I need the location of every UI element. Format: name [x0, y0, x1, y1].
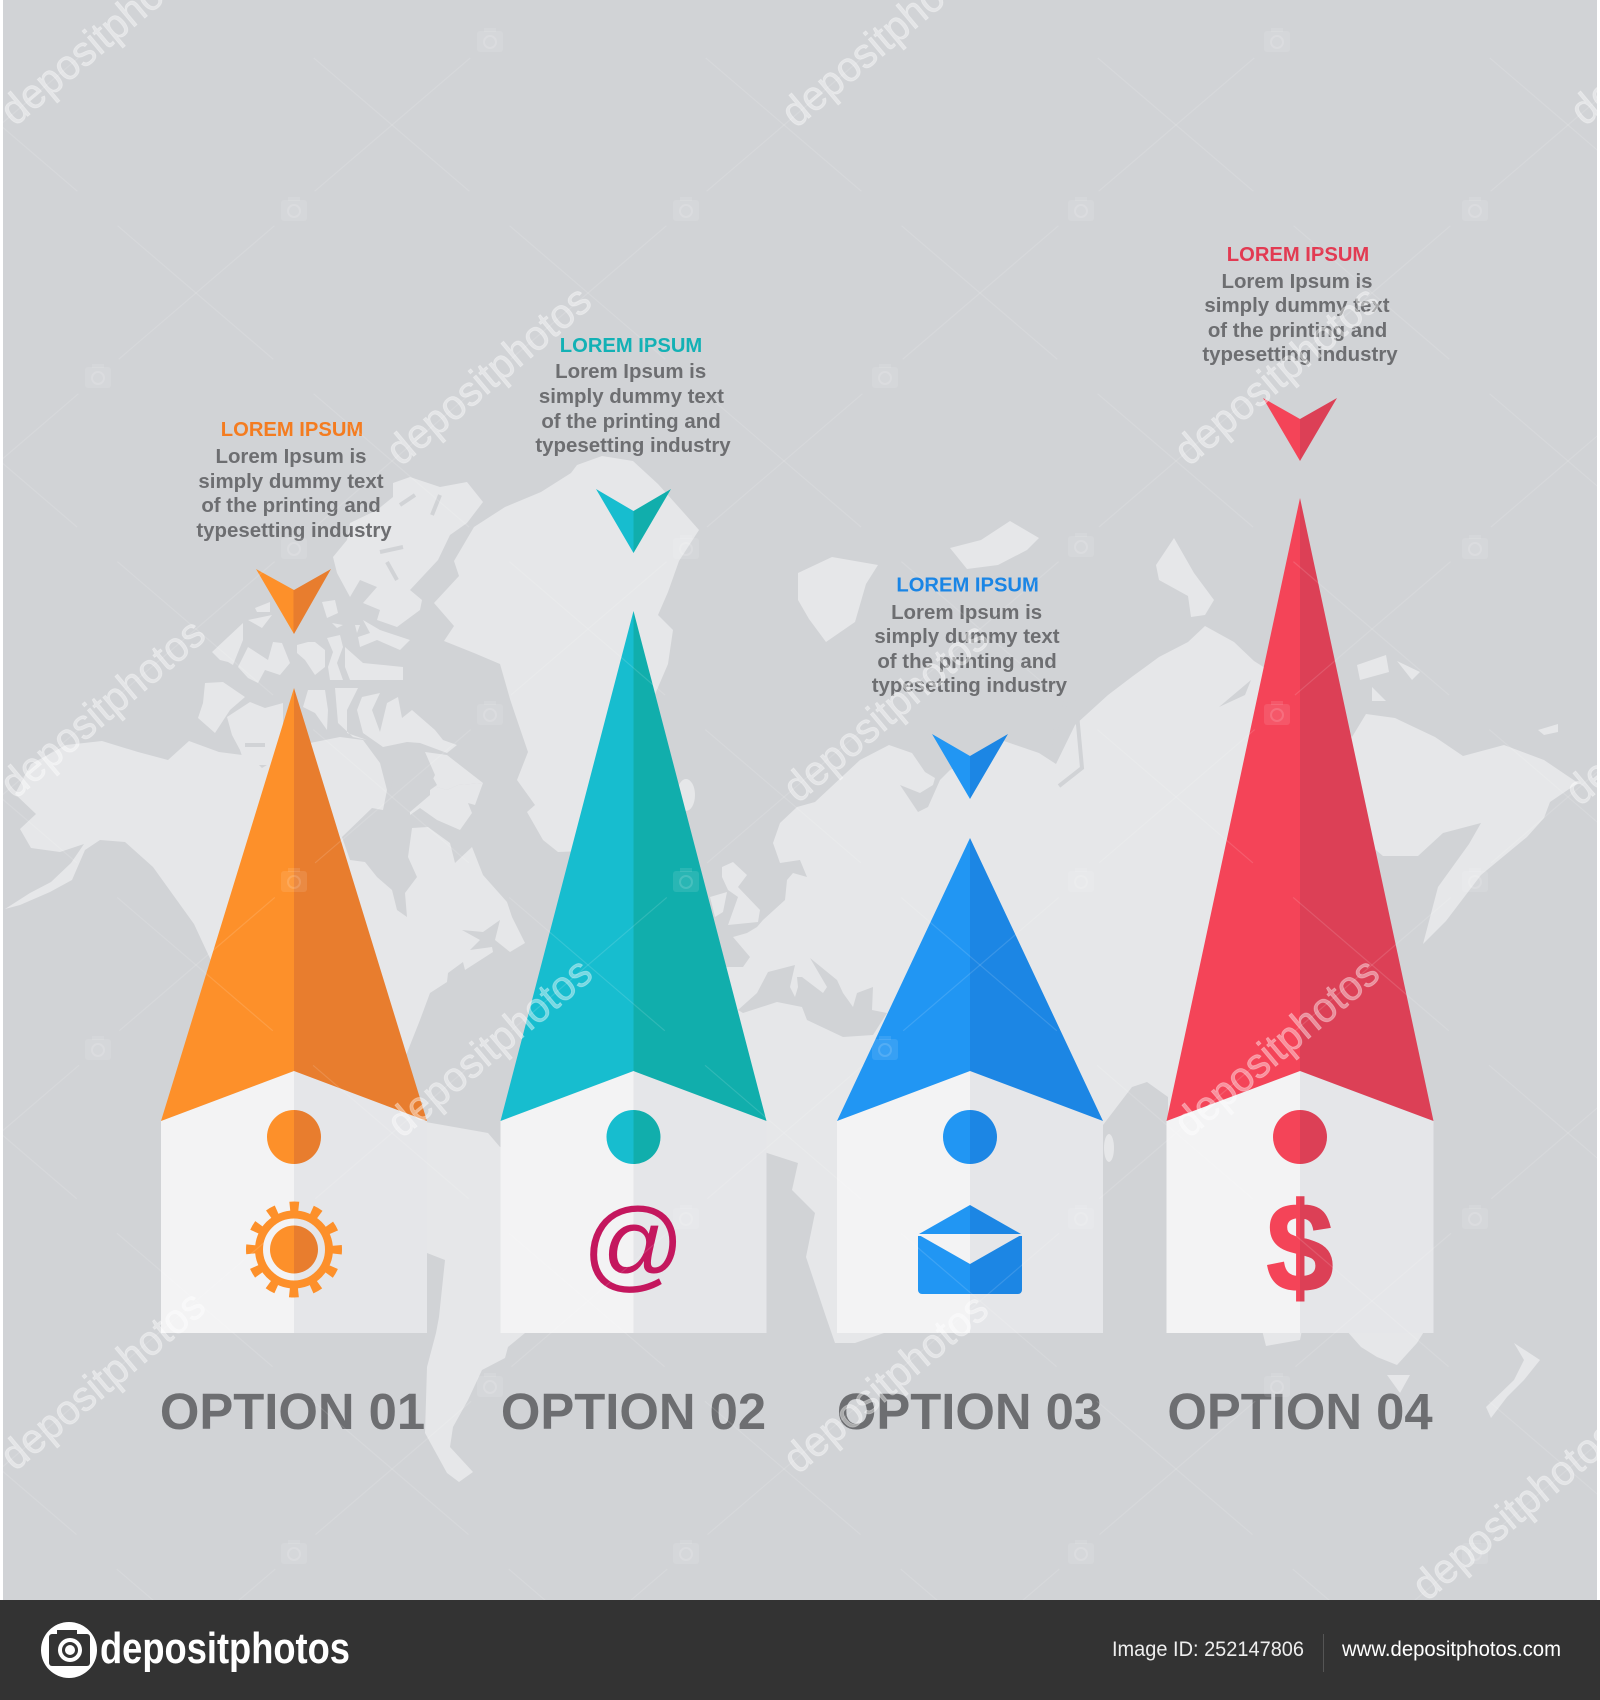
- footer bar: [0, 1600, 1600, 1700]
- option 01 column: [160, 419, 427, 1440]
- text block 02: [535, 335, 731, 457]
- text block 03: [872, 574, 1068, 697]
- icon: at sign: @: [582, 1189, 685, 1301]
- text block 04: of the printing and: [1208, 319, 1387, 342]
- dot 02: [606, 1110, 660, 1164]
- Arctic Russia islands: [798, 557, 878, 642]
- Iceland: [677, 779, 695, 811]
- text block 03: typesetting industry: [872, 674, 1068, 697]
- Africa south tip and Australia: [1262, 1330, 1302, 1346]
- Greenland: [434, 456, 699, 852]
- text block 01: Lorem Ipsum is: [215, 445, 367, 468]
- gulfs and channels: [1219, 680, 1251, 707]
- option 04 column: [1166, 244, 1434, 1440]
- text block 03: simply dummy text: [874, 625, 1060, 648]
- dot 04: [1273, 1110, 1327, 1164]
- text block 01: of the printing and: [201, 494, 381, 517]
- chevron 01: [256, 569, 331, 634]
- option 03 column: [837, 574, 1103, 1440]
- triangle 02: [500, 611, 766, 1121]
- label 01: OPTION 01: [160, 1383, 425, 1440]
- label 04: OPTION 04: [1167, 1383, 1433, 1440]
- chevron 03: [932, 734, 1008, 799]
- box 02: [500, 1071, 766, 1333]
- text block 04: [1202, 244, 1398, 366]
- footer divider: [1323, 1634, 1324, 1672]
- text block 02: LOREM IPSUM: [560, 335, 702, 357]
- box 03: [837, 1071, 1103, 1333]
- text block 02: Lorem Ipsum is: [555, 360, 706, 383]
- text block 04: Lorem Ipsum is: [1221, 270, 1373, 293]
- image id: Image ID: 252147806: [1112, 1638, 1304, 1661]
- text block 02: simply dummy text: [539, 385, 724, 408]
- Indian Ocean: [1103, 1082, 1168, 1340]
- text block 01: LOREM IPSUM: [221, 419, 363, 441]
- world map: [5, 456, 1578, 1482]
- seas overlaid on the map: [245, 495, 1251, 1340]
- watermark overlay: depositphotos: [1165, 276, 1388, 474]
- British Isles: [722, 862, 760, 925]
- North America: [5, 737, 525, 1121]
- text block 04: simply dummy text: [1204, 294, 1390, 317]
- watermark overlay: depositphotos: [774, 1284, 997, 1482]
- Foxe basin: [385, 743, 437, 810]
- icon: dollar: $: [1267, 1178, 1333, 1319]
- chevron 04: [1263, 398, 1337, 461]
- Baffin north: [357, 693, 457, 753]
- box 04: [1166, 1071, 1434, 1333]
- footer logo text: depositphotos: [100, 1624, 350, 1673]
- watermark overlay: depositphotos: [377, 276, 600, 474]
- text block 01: simply dummy text: [198, 470, 384, 493]
- box 01: [161, 1071, 427, 1333]
- option 02 column: [500, 335, 766, 1440]
- triangle 04: [1166, 498, 1434, 1121]
- dot 03: [943, 1110, 997, 1164]
- text block 03: Lorem Ipsum is: [891, 601, 1042, 624]
- footer url: www.depositphotos.com: [1341, 1638, 1561, 1661]
- text block 02: typesetting industry: [535, 434, 731, 457]
- text block 04: LOREM IPSUM: [1227, 244, 1369, 266]
- icon: footer camera logo: [41, 1622, 97, 1678]
- triangle 01: [161, 688, 427, 1121]
- text block 03: of the printing and: [877, 650, 1057, 673]
- watermark overlay: depositphotos: [1165, 948, 1388, 1146]
- watermark overlay: depositphotos: [378, 948, 601, 1146]
- label 03: OPTION 03: [837, 1383, 1102, 1440]
- text block 02: of the printing and: [541, 410, 721, 433]
- South America: [420, 1121, 560, 1482]
- chevron 02: [596, 489, 671, 553]
- Mediterranean: [738, 958, 887, 1037]
- Madagascar: [1104, 1134, 1114, 1162]
- watermark overlay: depositphotos: [774, 613, 997, 811]
- text block 03: LOREM IPSUM: [896, 574, 1039, 596]
- text block 01: [196, 419, 392, 542]
- Eurasia and Africa: [700, 626, 1578, 1343]
- label 02: OPTION 02: [501, 1383, 766, 1440]
- text block 01: typesetting industry: [196, 519, 392, 542]
- Ellesmere group: [333, 477, 483, 627]
- Arctic islands: [212, 623, 243, 665]
- text block 04: typesetting industry: [1202, 343, 1398, 366]
- New Zealand: [1486, 1343, 1540, 1418]
- icon: envelope: [918, 1205, 1022, 1294]
- dot 01: [267, 1110, 321, 1164]
- Baffin south: [410, 783, 483, 830]
- icon: gear: [251, 1206, 337, 1292]
- triangle 03: [837, 838, 1103, 1121]
